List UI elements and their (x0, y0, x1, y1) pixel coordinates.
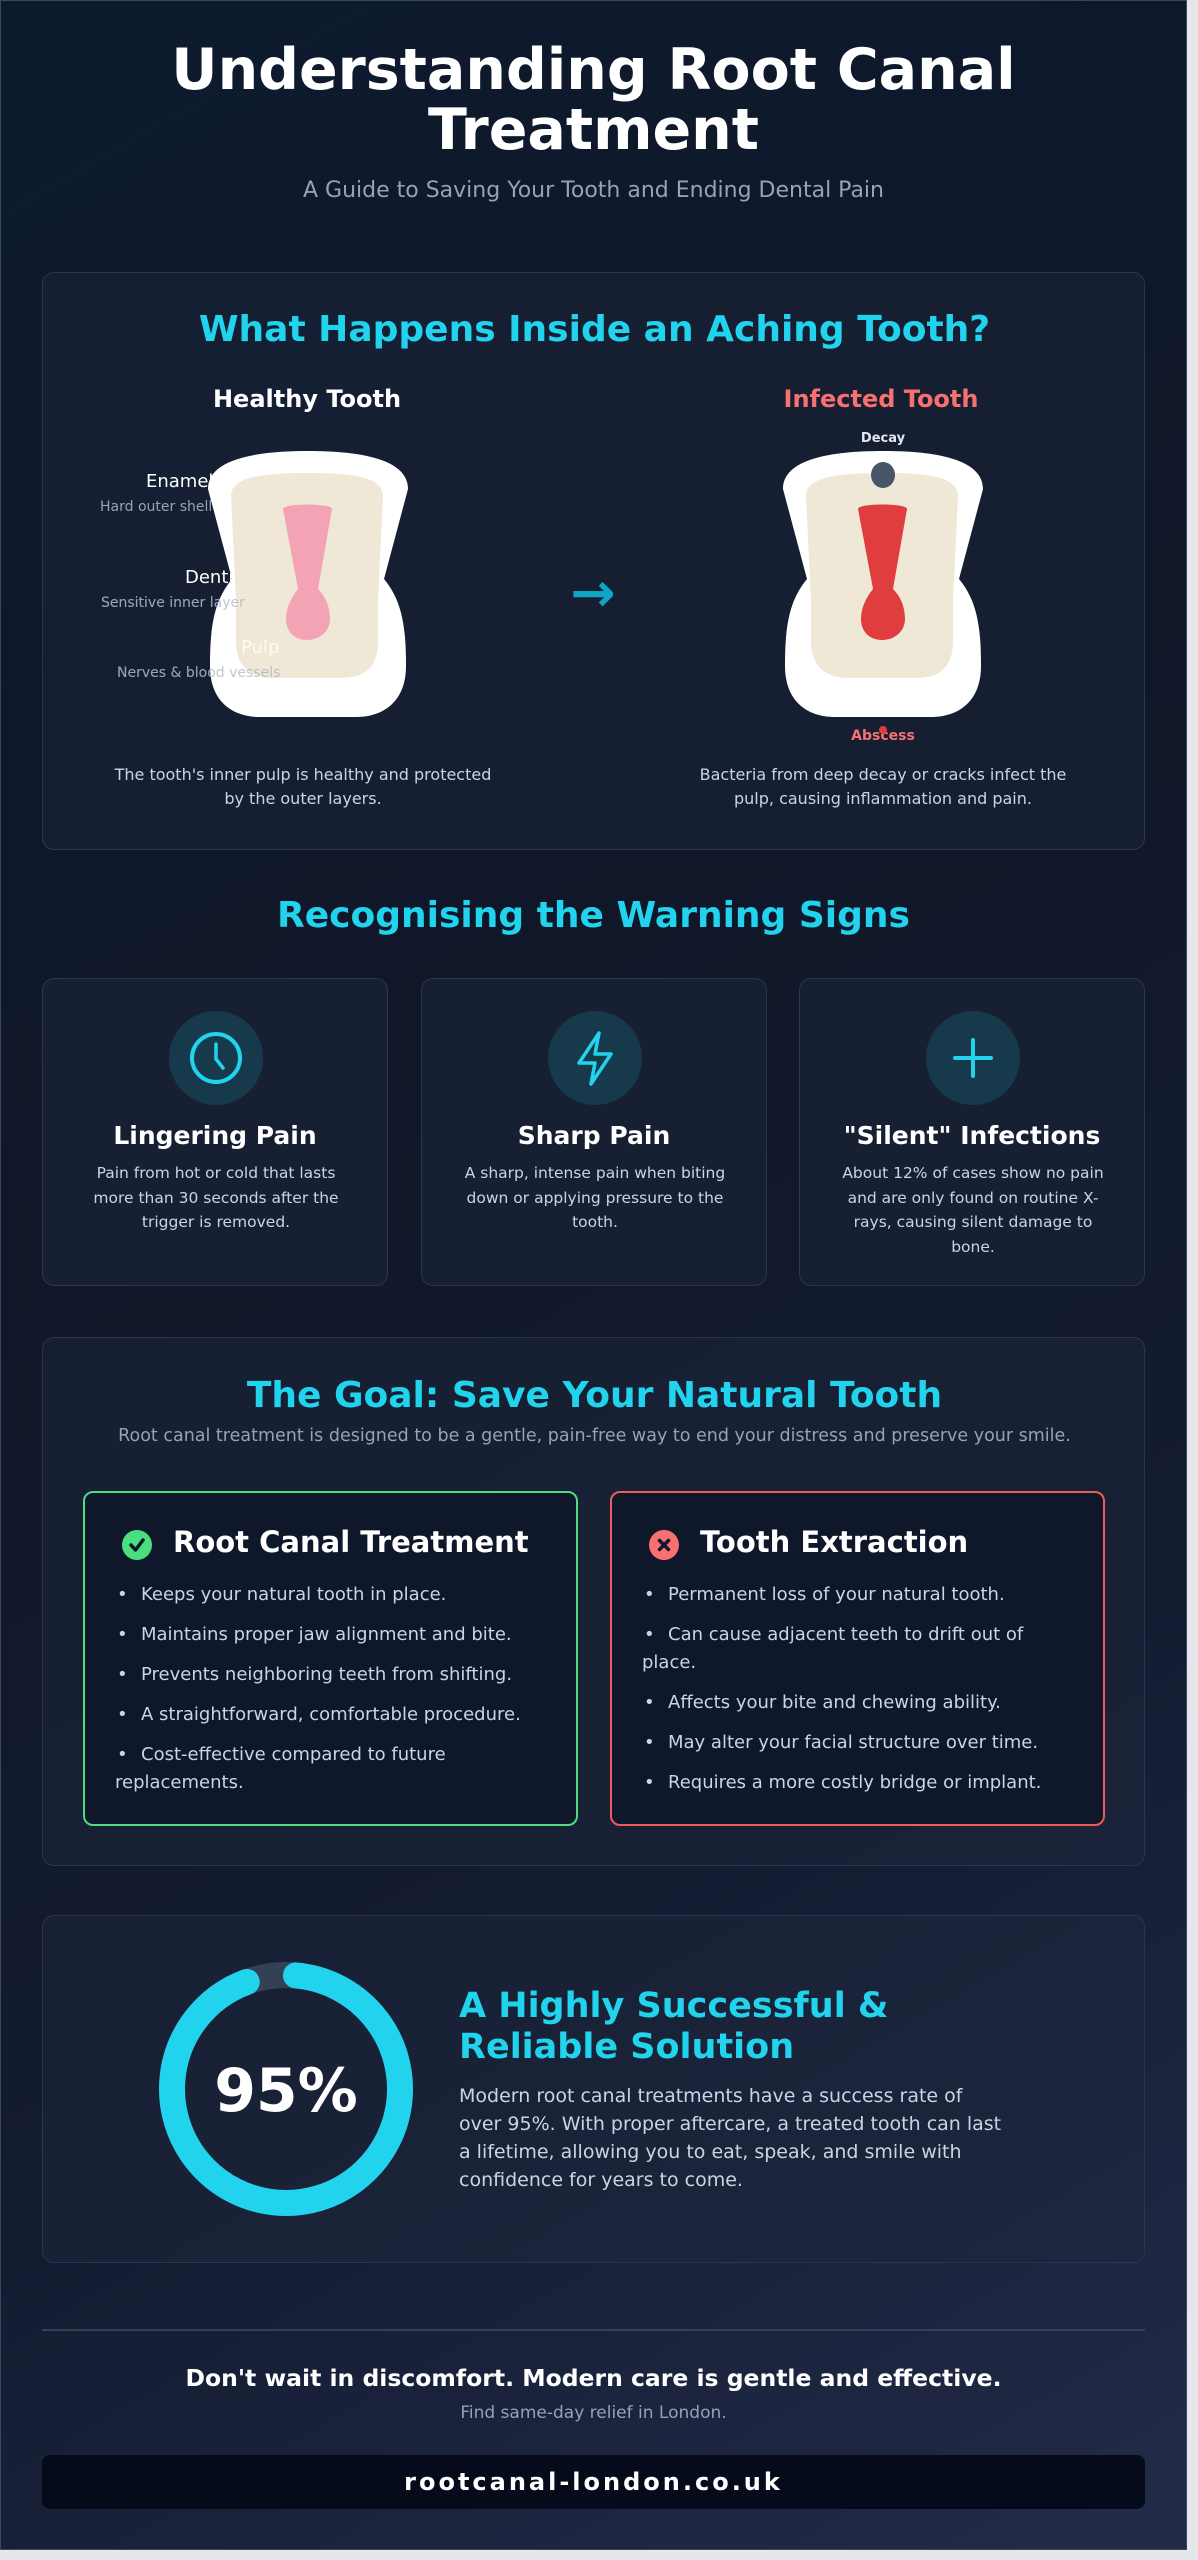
arrow: → (570, 561, 616, 624)
list: drawbacks: • (644, 1624, 655, 1645)
panel: inside tooth: Nerves & blood vessels (117, 665, 280, 681)
label: decay: Decay (861, 431, 905, 446)
list: benefits: • (117, 1624, 128, 1645)
divider (42, 2329, 1145, 2331)
card: sharp pain: A sharp, intense pain when biting down or applying pressure to the tooth. (465, 1164, 725, 1231)
list: benefits: Cost-effective compared to future replacements. (115, 1744, 446, 1793)
list: drawbacks: • (644, 1692, 655, 1713)
tooth labels: Enamel (146, 471, 213, 492)
list: benefits: A straightforward, comfortable procedure. (141, 1704, 521, 1725)
list: benefits: Prevents neighboring teeth from shifting. (141, 1664, 512, 1685)
card: lingering pain: Pain from hot or cold that lasts more than 30 seconds after the trigger is removed. (93, 1164, 339, 1231)
url bar (42, 2455, 1145, 2509)
list: benefits (115, 1584, 521, 1793)
label: abscess: Abscess (851, 728, 915, 744)
list: drawbacks: • (644, 1584, 655, 1605)
title: Understanding Root Canal (171, 37, 1016, 103)
list: benefits: • (117, 1744, 128, 1765)
chart: 95% ring (159, 1962, 413, 2216)
tooth labels: Hard outer shell (100, 499, 212, 515)
list: drawbacks (642, 1584, 1041, 1793)
card: sharp pain: Sharp Pain (518, 1121, 670, 1150)
panel: success (42, 1915, 1145, 2263)
label: healthy tooth: Healthy Tooth (213, 385, 401, 413)
list: drawbacks: Can cause adjacent teeth to drift out of place. (642, 1624, 1023, 1673)
list: benefits: Keeps your natural tooth in place. (141, 1584, 446, 1605)
list: drawbacks: • (644, 1732, 655, 1753)
label: infected tooth: Infected Tooth (784, 385, 978, 413)
icon: check (122, 1530, 152, 1560)
icon: healthy tooth (208, 451, 408, 717)
icon: plus (926, 1011, 1020, 1105)
caption: healthy: The tooth's inner pulp is healthy and protected by the outer layers. (115, 765, 491, 808)
tooth labels overlay (visible parts): Pulp (241, 637, 279, 658)
panel: inside tooth (42, 272, 1145, 850)
url bar: rootcanal-london.co.uk (404, 2468, 783, 2496)
icon: infected tooth (783, 451, 983, 717)
card: silent infections: About 12% of cases show no pain and are only found on routine X-rays, causing silent damage to bone. (842, 1164, 1104, 1256)
text: goal subtitle: Root canal treatment is designed to be a gentle, pain-free way to end your distress and preserve your smile. (118, 1426, 1071, 1446)
box: tooth extraction (610, 1491, 1105, 1826)
icon: lightning (548, 1011, 642, 1105)
heading: success (459, 1986, 888, 2067)
subtitle: A Guide to Saving Your Tooth and Ending Dental Pain (303, 178, 884, 203)
tooth labels (100, 471, 280, 681)
heading: success: Reliable Solution (459, 2027, 794, 2067)
title: Treatment (428, 97, 759, 163)
list: drawbacks: Requires a more costly bridge or implant. (668, 1772, 1041, 1793)
list: benefits: • (117, 1704, 128, 1725)
text: success paragraph: Modern root canal treatments have a success rate of over 95%. With proper aftercare, a treated tooth can last a lifetime, allowing you to eat, speak, and smile with confidence for years to come. (459, 2085, 1001, 2191)
cta: Don't wait in discomfort. Modern care is gentle and effective. (185, 2364, 1002, 2392)
card: sharp pain (421, 978, 767, 1286)
icon: cross (649, 1530, 679, 1560)
heading: success: A Highly Successful & (459, 1986, 888, 2026)
card: lingering pain: Lingering Pain (113, 1121, 317, 1150)
caption: infected: Bacteria from deep decay or cracks infect the pulp, causing inflammation and pain. (700, 765, 1066, 808)
card: silent infections: "Silent" Infections (844, 1121, 1100, 1150)
list: benefits: • (117, 1584, 128, 1605)
chart: 95% ring: 95% (214, 2056, 358, 2126)
box: root canal treatment (83, 1491, 578, 1826)
icon: clock (169, 1011, 263, 1105)
card: silent infections (799, 978, 1145, 1286)
tooth labels: Sensitive inner layer (101, 595, 245, 611)
panel: goal (42, 1337, 1145, 1866)
box: root canal treatment: Root Canal Treatment (173, 1525, 529, 1559)
heading: goal: The Goal: Save Your Natural Tooth (247, 1375, 942, 1416)
list: drawbacks: May alter your facial structure over time. (668, 1732, 1038, 1753)
tooth labels overlay (visible parts): Sensitive inner layer (101, 595, 245, 611)
heading: what happens: What Happens Inside an Aching Tooth? (199, 309, 990, 350)
card: lingering pain (42, 978, 388, 1286)
list: drawbacks: Permanent loss of your natural tooth. (668, 1584, 1005, 1605)
list: drawbacks: Affects your bite and chewing ability. (668, 1692, 1001, 1713)
tooth labels overlay (visible parts): Nerves & blood vessels (117, 665, 280, 681)
tooth labels: Pulp (241, 637, 279, 658)
list: benefits: • (117, 1664, 128, 1685)
heading: warning signs: Recognising the Warning Signs (277, 895, 910, 936)
tooth labels overlay (visible parts) (101, 595, 280, 681)
list: benefits: Maintains proper jaw alignment and bite. (141, 1624, 512, 1645)
title (171, 37, 1016, 163)
tooth labels: Dentin (185, 567, 245, 588)
cta sub: Find same-day relief in London. (460, 2403, 727, 2423)
box: tooth extraction: Tooth Extraction (700, 1525, 968, 1559)
list: drawbacks: • (644, 1772, 655, 1793)
